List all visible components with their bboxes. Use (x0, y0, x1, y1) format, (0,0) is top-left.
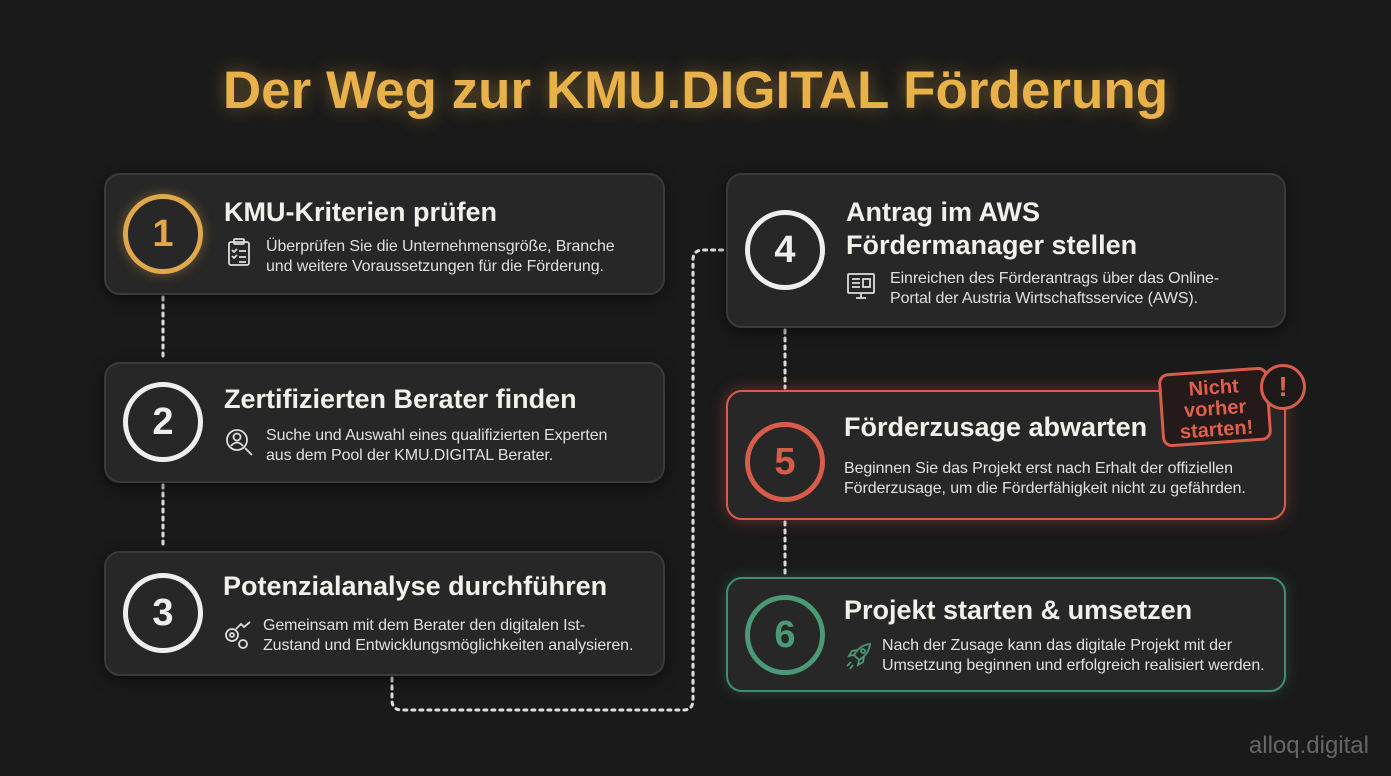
circle 1: 1 (152, 212, 174, 254)
text 2: aus dem Pool der KMU.DIGITAL Berater. (266, 447, 553, 464)
circle 3: 3 (152, 592, 174, 634)
circle 3 (123, 573, 203, 653)
text 6: Umsetzung beginnen und erfolgreich realisiert werden. (882, 657, 1264, 674)
text 1 (266, 238, 615, 275)
text 4: Portal der Austria Wirtschaftsservice (AWS). (890, 290, 1198, 307)
icon: exclamation: ! (1278, 371, 1288, 402)
text 2 (266, 427, 607, 464)
panel: step 3 (104, 551, 665, 676)
circle 1 (123, 194, 203, 274)
circle 5 (745, 422, 825, 502)
text 2: Suche und Auswahl eines qualifizierten Experten (266, 427, 607, 444)
title: Der Weg zur KMU.DIGITAL Förderung (223, 61, 1168, 120)
callout: nicht vorher starten: Nicht (1188, 375, 1239, 401)
text 3: Zustand und Entwicklungsmöglichkeiten analysieren. (263, 637, 633, 654)
circle 5: 5 (774, 440, 796, 482)
heading 4: Antrag im AWS (846, 197, 1040, 227)
text 6: Nach der Zusage kann das digitale Projekt mit der (882, 637, 1232, 654)
panel: step 2 (104, 362, 665, 483)
text 5: Förderzusage, um die Förderfähigkeit nicht zu gefährden. (844, 480, 1246, 497)
heading 1: KMU-Kriterien prüfen (224, 197, 497, 227)
circle 4 (745, 210, 825, 290)
icon: clipboard (228, 238, 250, 266)
text 3 (263, 617, 633, 654)
text 1: und weitere Voraussetzungen für die Förderung. (266, 258, 604, 275)
panel: step 6 (726, 577, 1286, 692)
heading 3: Potenzialanalyse durchführen (223, 571, 607, 601)
circle 6: 6 (774, 614, 796, 656)
callout: nicht vorher starten (1158, 364, 1306, 448)
circle 4: 4 (774, 228, 796, 270)
text 5: Beginnen Sie das Projekt erst nach Erhalt der offiziellen (844, 460, 1233, 477)
panel: step 4 (726, 173, 1286, 328)
panel: step 5 (726, 390, 1286, 520)
watermark: alloq.digital (1249, 732, 1369, 759)
heading 4 (846, 197, 1137, 260)
icon: person search (226, 429, 253, 456)
text 4: Einreichen des Förderantrags über das Online- (890, 270, 1219, 287)
icon: rocket (846, 643, 871, 670)
icon: monitor (847, 273, 875, 299)
circle 2: 2 (152, 400, 174, 442)
callout: nicht vorher starten: vorher (1183, 396, 1247, 422)
callout: nicht vorher starten: starten! (1179, 416, 1254, 443)
icon: gears chart (225, 621, 250, 649)
heading 6: Projekt starten & umsetzen (844, 595, 1192, 625)
text 3: Gemeinsam mit dem Berater den digitalen Ist- (263, 617, 585, 634)
panel: step 1 (104, 173, 665, 295)
heading 5: Förderzusage abwarten (844, 412, 1147, 442)
text 1: Überprüfen Sie die Unternehmensgröße, Branche (266, 238, 615, 255)
text 5 (844, 460, 1246, 497)
text 4 (890, 270, 1219, 307)
heading 4: Fördermanager stellen (846, 230, 1137, 260)
text 6 (882, 637, 1264, 674)
icon: exclamation (1260, 364, 1306, 410)
circle 6 (745, 595, 825, 675)
circle 2 (123, 382, 203, 462)
heading 2: Zertifizierten Berater finden (224, 384, 577, 414)
